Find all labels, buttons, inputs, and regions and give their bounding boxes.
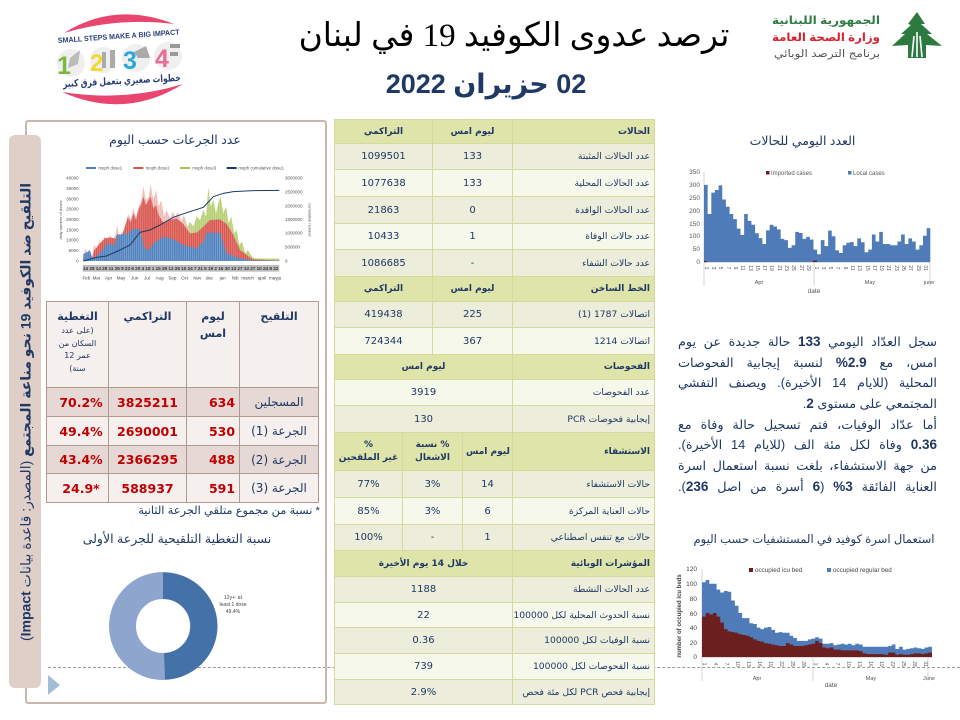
chart: daily vaccine doses: Feb [82,275,91,280]
table: cases, hotline, tests, hospitalisation, indicators: الخط الساخن [591,284,650,294]
chart: daily vaccine doses: Nov [193,275,202,280]
table: cases, hotline, tests, hospitalisation, indicators: عدد حالات الوفاة [585,231,650,242]
chart: daily cases: Imported cases [771,171,812,177]
chart: daily cases: 17 [761,265,767,271]
chart: daily cases: 19 [878,265,884,271]
logo: small steps make a big impact: خطوات صغيري بتعمل فرق كبير [62,73,181,90]
table: cases, hotline, tests, hospitalisation, indicators: غير الملقحين [339,452,398,462]
table: cases, hotline, tests, hospitalisation, indicators: ليوم امس [451,284,494,294]
table: cases, hotline, tests, hospitalisation, indicators: 77% [357,478,380,490]
chart: daily vaccine doses: 10000 [66,238,79,243]
text block: daily summary: من جهة الاستشفاء، بلغت نسبة استعمال اسرة [678,458,937,473]
table: cases, hotline, tests, hospitalisation, indicators: 2.9% [411,686,436,698]
chart: daily cases: 1 [703,267,709,270]
chart: hospital bed occupancy: 16 [867,661,873,667]
vertical tab: vaccination heading [9,135,41,688]
chart: daily vaccine doses: 3000000 [285,176,303,181]
table: vaccination: 588937 [121,480,174,496]
chart: daily cases: 11 [739,265,745,271]
chart: daily vaccine doses: 25000 [66,207,79,212]
chart: hospital bed occupancy: 1 [701,663,707,666]
chart: hospital bed occupancy: May [866,676,876,682]
table: vaccination: (على عدد [61,326,94,335]
text block: daily summary: المحلية (للايام 14 الأخيرة). ويصنف التفشي [678,375,937,390]
chart: daily vaccine doses: moph cumulative dose1 [238,166,285,171]
chart: hospital bed occupancy: 10 [845,661,851,667]
table: cases, hotline, tests, hospitalisation, indicators: 3% [425,506,440,516]
text block: daily summary [678,334,937,494]
table: cases, hotline, tests, hospitalisation, indicators: نسبة الحدوث المحلية لكل 100000 [513,610,650,620]
table: cases, hotline, tests, hospitalisation, indicators: - [471,258,474,268]
chart: daily vaccine doses: Mar [92,275,101,280]
heading: daily cases: العدد اليومي للحالات [750,134,855,148]
table: cases, hotline, tests, hospitalisation, indicators: عدد حالات الشفاء [582,258,650,268]
logo: ministry of public health [772,12,942,60]
chart: daily cases: 29 [915,265,921,271]
footnote: * نسبة من مجموع متلقي الجرعة الثانية [138,505,320,517]
dashed guide line [48,667,960,668]
chart: hospital bed occupancy: 13 [856,661,862,667]
chart: hospital bed occupancy: occupied regular bed [833,567,892,574]
table: cases, hotline, tests, hospitalisation, indicators: - [431,532,434,543]
table: cases, hotline, tests, hospitalisation, indicators: ليوم امس [466,446,510,456]
chart: daily cases: 11 [849,265,855,271]
chart: daily cases: 7 [834,267,840,270]
chart: daily cases: 3 [710,267,716,270]
table: cases, hotline, tests, hospitalisation, indicators: 1099501 [361,151,406,162]
date heading: 02 حزيران 2022 [386,69,586,99]
chart: daily vaccine doses: Aug [156,275,164,280]
chart: daily vaccine doses: Jun [131,275,139,280]
chart: hospital bed occupancy: 31 [922,661,928,667]
table: vaccination: ليوم [201,310,225,323]
chart: daily cases: 21 [776,265,782,271]
logo: small steps make a big impact: 4 [155,45,169,73]
logo: small steps make a big impact: SMALL STEPS MAKE A BIG IMPACT [58,27,180,45]
chart: daily cases: 50 [693,246,700,253]
table: cases, hotline, tests, hospitalisation, indicators: 419438 [364,309,403,320]
text block: daily summary: 0.36 وفاة لكل مئة الف (للايام 14 الأخيرة). [678,437,937,452]
table: cases, hotline, tests, hospitalisation, indicators: عدد الحالات المحلية [574,178,650,188]
table: vaccination: 70.2% [59,394,103,410]
table: vaccination: التغطية [57,310,98,323]
chart: daily vaccine doses: 2000000 [285,203,303,208]
arrow marker [48,675,60,695]
chart: daily vaccine doses: 2500000 [285,189,303,194]
chart: daily cases: 13 [856,265,862,271]
table: cases, hotline, tests, hospitalisation, indicators: 133 [463,151,482,162]
table: cases, hotline, tests, hospitalisation, indicators: عدد الحالات الوافدة [575,204,650,216]
chart: daily vaccine doses: 15000 [66,227,79,232]
chart: daily vaccine doses: Oct [181,275,189,280]
chart: hospital bed occupancy: 19 [878,661,884,667]
chart: daily vaccine doses: mayja [269,275,281,280]
heading: first dose coverage: نسبة التغطية التلقيحية للجرعة الأولى [83,532,271,546]
chart: hospital bed occupancy: date [825,682,838,689]
table: cases, hotline, tests, hospitalisation, indicators: 225 [463,309,482,320]
chart: hospital bed occupancy [676,566,935,689]
table: vaccination: 634 [209,394,235,410]
table: cases, hotline, tests, hospitalisation, indicators [334,119,655,705]
table: cases, hotline, tests, hospitalisation, indicators: 130 [414,414,433,424]
chart: daily cases: june [923,280,934,286]
chart: daily cases: 25 [900,265,906,271]
chart: daily cases: 29 [805,265,811,271]
table: cases, hotline, tests, hospitalisation, indicators: اتصالات 1787 (1) [578,309,650,320]
chart: daily cases: Apr [755,280,763,286]
chart: daily vaccine doses: Sep [168,275,177,280]
chart: daily cases: 200 [689,208,700,215]
chart: daily cases: 100 [689,233,700,240]
table: cases, hotline, tests, hospitalisation, indicators: 724344 [364,336,403,346]
chart: daily vaccine doses: 14 28 14 28 11 25 9 23 6 20 4 18 1 15 29 12 26 10 24 7 21 5 19 2 16 30 13 27 13 27 10 24 8 22 [83,266,279,271]
table: vaccination: الجرعة (1) [251,424,307,438]
table: cases, hotline, tests, hospitalisation, indicators: 14 [481,478,494,490]
table: cases, hotline, tests, hospitalisation, indicators: اتصالات 1214 [594,336,650,346]
chart: daily vaccine doses: dec [206,275,214,280]
table: cases, hotline, tests, hospitalisation, indicators: المؤشرات الوبائية [571,558,650,568]
logo: small steps make a big impact [57,14,183,104]
logo: ministry of public health: وزارة الصحة العامة [772,32,880,45]
table: vaccination: 488 [209,452,235,467]
chart: daily vaccine doses: 40000 [66,176,79,181]
table: cases, hotline, tests, hospitalisation, indicators: 739 [414,661,433,672]
table: cases, hotline, tests, hospitalisation, indicators: عدد الحالات النشطة [573,584,650,595]
text block: daily summary: امس، مع 2.9% لنسبة إيجابية الفحوصات [678,355,937,370]
chart: daily vaccine doses: May [117,275,126,280]
chart: daily vaccine doses: moph dose3 [192,166,217,171]
chart: daily cases: 23 [893,265,899,271]
table: cases, hotline, tests, hospitalisation, indicators: 22 [417,610,430,620]
chart: daily cases: Local cases [853,171,885,177]
chart: daily cases: 23 [783,265,789,271]
table: cases, hotline, tests, hospitalisation, indicators: إيجابية فحوصات PCR [567,414,650,424]
table: cases, hotline, tests, hospitalisation, indicators: ليوم امس [402,362,445,372]
chart: daily vaccine doses: Jul [144,275,150,280]
table: cases, hotline, tests, hospitalisation, indicators: نسبة الفحوصات لكل 100000 [533,661,650,672]
chart: hospital bed occupancy: Apr [753,676,761,682]
chart: daily vaccine doses: moph dose1 [98,166,123,171]
chart: daily cases: 25 [790,265,796,271]
chart: hospital bed occupancy: 16 [756,661,762,667]
chart: hospital bed occupancy: 22 [889,661,895,667]
table: cases, hotline, tests, hospitalisation, indicators: التراكمي [364,126,403,136]
title: ترصد عدوى الكوفيد 19 في لبنان [299,18,729,54]
logo: small steps make a big impact: 2 [90,50,103,77]
chart: daily vaccine doses: cumulative number [307,203,312,238]
logo: small steps make a big impact: 3 [123,47,137,75]
chart: daily cases: 300 [689,182,700,189]
chart: hospital bed occupancy: number of occupied icu beds [677,574,683,658]
table: cases, hotline, tests, hospitalisation, indicators: التراكمي [364,284,403,294]
chart: daily cases: May [865,280,875,286]
chart: hospital bed occupancy: 20 [690,640,697,647]
table: vaccination: 3825211 [117,394,178,410]
table: vaccination: امس [200,327,226,340]
table: cases, hotline, tests, hospitalisation, indicators: 3919 [411,387,436,398]
chart: daily vaccine doses [58,166,312,280]
chart: daily cases [689,169,934,295]
table: cases, hotline, tests, hospitalisation, indicators: حالات مع تنفس اصطناعي [551,532,650,543]
table: vaccination: سنة) [69,364,86,372]
chart: daily cases: 9 [842,267,848,270]
table: cases, hotline, tests, hospitalisation, indicators: 3% [425,478,440,490]
logo: ministry of public health: برنامج الترصد الوبائي [774,48,880,60]
table: cases, hotline, tests, hospitalisation, indicators: الاشغال [415,452,450,462]
chart: daily cases: 150 [689,221,700,228]
table: cases, hotline, tests, hospitalisation, indicators: 6 [484,506,491,516]
chart: daily vaccine doses: 30000 [66,196,79,201]
table: cases, hotline, tests, hospitalisation, indicators: الفحوصات [604,362,650,372]
table: cases, hotline, tests, hospitalisation, indicators: عدد الحالات المثبتة [578,151,650,162]
chart: hospital bed occupancy: 7 [723,663,729,666]
chart: hospital bed occupancy: 4 [712,663,718,666]
chart: hospital bed occupancy: 4 [823,663,829,666]
chart: hospital bed occupancy: 28 [800,661,806,667]
chart: daily cases: date [808,288,821,295]
chart: daily vaccine doses: 5000 [69,248,79,253]
table: cases, hotline, tests, hospitalisation, indicators: 133 [463,178,482,188]
table: vaccination: 591 [209,480,235,496]
table: cases, hotline, tests, hospitalisation, indicators: 0.36 [412,635,435,646]
table: vaccination: 2366295 [117,452,178,467]
chart: daily vaccine doses: Apr [105,275,113,280]
heading: daily doses: عدد الجرعات حسب اليوم [109,133,241,147]
table: cases, hotline, tests, hospitalisation, indicators: 85% [357,506,380,516]
text block: daily summary: أما عدّاد الوفيات، فتم تسجيل حالة وفاة مع [678,417,937,432]
table: vaccination: المسجلين [254,395,304,409]
chart: daily vaccine doses: 1000000 [285,231,303,236]
chart: daily cases: 21 [885,265,891,271]
table: cases, hotline, tests, hospitalisation, indicators: نسبة الوفيات لكل 100000 [544,635,650,646]
table: cases, hotline, tests, hospitalisation, indicators: خلال 14 يوم الأخيرة [379,558,468,568]
chart: daily cases: 27 [907,265,913,271]
table: cases, hotline, tests, hospitalisation, indicators: ليوم امس [451,126,494,136]
chart: daily vaccine doses: jan [219,275,226,280]
chart: coverage donut: least 1 dose [220,602,247,608]
chart: daily cases: 15 [754,265,760,271]
table: cases, hotline, tests, hospitalisation, indicators: % [364,440,373,450]
chart: hospital bed occupancy: 100 [686,581,697,588]
table: cases, hotline, tests, hospitalisation, indicators: % نسبة [416,440,449,450]
logo: ministry of public health: الجمهورية اللبنانية [772,15,880,28]
chart: coverage donut: 12y+: at [224,595,243,601]
chart: daily cases: 1 [813,267,819,270]
chart: hospital bed occupancy: 7 [834,663,840,666]
table: vaccination: التلقيح [260,310,298,323]
logo: small steps make a big impact: 1 [57,52,71,80]
chart: daily vaccine doses: 1500000 [285,217,303,222]
text block: daily summary: سجل العدّاد اليومي 133 حالة جديدة عن يوم [678,334,937,349]
table: cases, hotline, tests, hospitalisation, indicators: 1 [469,231,476,242]
chart: daily cases: 5 [717,267,723,270]
chart: hospital bed occupancy: June [923,676,935,682]
chart: daily cases: 250 [689,195,700,202]
chart: hospital bed occupancy: 19 [767,661,773,667]
table: vaccination: عمر 12 [64,351,91,360]
chart: daily cases: 0 [696,259,700,266]
chart: daily cases: 17 [871,265,877,271]
table: cases, hotline, tests, hospitalisation, indicators: 367 [463,336,482,346]
table: cases, hotline, tests, hospitalisation, indicators: 1188 [411,584,436,595]
chart: daily cases: 31 [922,265,928,271]
table: cases, hotline, tests, hospitalisation, indicators: عدد الفحوصات [593,387,650,398]
table: vaccination: 43.4% [59,452,103,467]
table: cases, hotline, tests, hospitalisation, indicators: 1 [484,532,491,543]
chart: hospital bed occupancy: 80 [690,596,697,603]
table: vaccination: 24.9* [62,480,100,496]
chart: daily cases: 3 [820,267,826,270]
table: vaccination [46,301,319,503]
table: cases, hotline, tests, hospitalisation, indicators: 1077638 [361,178,406,188]
table: vaccination: 2690001 [117,424,178,438]
chart: daily vaccine doses: april [258,275,266,280]
text block: daily summary: المجتمعي على مستوى 2. [803,396,937,411]
table: vaccination: 530 [209,424,235,438]
chart: daily cases: 15 [864,265,870,271]
chart: daily cases: 13 [747,265,753,271]
table: vaccination: السكان من [59,338,96,348]
chart: hospital bed occupancy: 40 [690,625,697,632]
chart: daily cases: 9 [732,267,738,270]
chart: daily vaccine doses: 20000 [66,217,79,222]
chart: daily cases: 19 [768,265,774,271]
chart: daily cases: 7 [725,267,731,270]
table: cases, hotline, tests, hospitalisation, indicators: 0 [469,204,476,216]
chart: daily vaccine doses: march [241,275,254,280]
chart: hospital bed occupancy: 60 [690,611,697,618]
chart: hospital bed occupancy: 28 [911,661,917,667]
chart: daily cases: 5 [827,267,833,270]
table: cases, hotline, tests, hospitalisation, indicators: 10433 [368,231,399,242]
text block: daily summary: العناية الفائقة 3% (6 أسرة من اصل 236). [678,479,937,494]
table: cases, hotline, tests, hospitalisation, indicators: 21863 [368,204,399,216]
chart: hospital bed occupancy: 25 [789,661,795,667]
chart: daily cases: 350 [689,169,700,176]
table: vaccination: 49.4% [59,424,103,438]
chart: hospital bed occupancy: 0 [693,654,697,661]
vertical tab: vaccination heading: التلقيح ضد الكوفيد 19 نحو مناعة المجتمع (المصدر: قاعدة بيانات Impact ) [17,182,33,640]
table: cases, hotline, tests, hospitalisation, indicators: إيجابية فحص PCR لكل مئة فحص [522,686,650,698]
chart: daily vaccine doses: feb [232,275,239,280]
table: cases, hotline, tests, hospitalisation, indicators: 100% [354,532,383,543]
chart: daily vaccine doses: 35000 [66,186,79,191]
panel: vaccination [25,120,327,704]
chart: hospital bed occupancy: 10 [734,661,740,667]
chart: daily vaccine doses: 0 [285,258,288,263]
chart: daily vaccine doses: moph dose2 [146,166,170,171]
table: cases, hotline, tests, hospitalisation, indicators: الاستشفاء [604,446,650,456]
table: cases, hotline, tests, hospitalisation, indicators: الحالات [618,126,650,136]
table: cases, hotline, tests, hospitalisation, indicators: حالات العناية المركزة [569,506,650,516]
chart: coverage donut [109,572,247,680]
chart: hospital bed occupancy: occupied icu bed [755,567,803,574]
table: cases, hotline, tests, hospitalisation, indicators: 1086685 [361,258,406,268]
chart: daily vaccine doses: 0 [76,258,79,263]
chart: hospital bed occupancy: 22 [778,661,784,667]
heading: hospital beds: استعمال اسرة كوفيد في المستشفيات حسب اليوم [693,533,935,546]
chart: coverage donut: 49.4% [226,609,241,615]
chart: daily cases: 27 [798,265,804,271]
table: vaccination: التراكمي [124,310,171,323]
chart: hospital bed occupancy: 25 [900,661,906,667]
chart: hospital bed occupancy: 13 [745,661,751,667]
table: vaccination: الجرعة (2) [251,452,307,466]
table: cases, hotline, tests, hospitalisation, indicators: حالات الاستشفاء [586,478,650,490]
chart: hospital bed occupancy: 1 [812,663,818,666]
chart: hospital bed occupancy: 120 [686,566,697,573]
chart: daily vaccine doses: 500000 [285,245,301,250]
table: vaccination: الجرعة (3) [251,481,307,495]
chart: daily vaccine doses: daily number of doses [58,200,63,240]
